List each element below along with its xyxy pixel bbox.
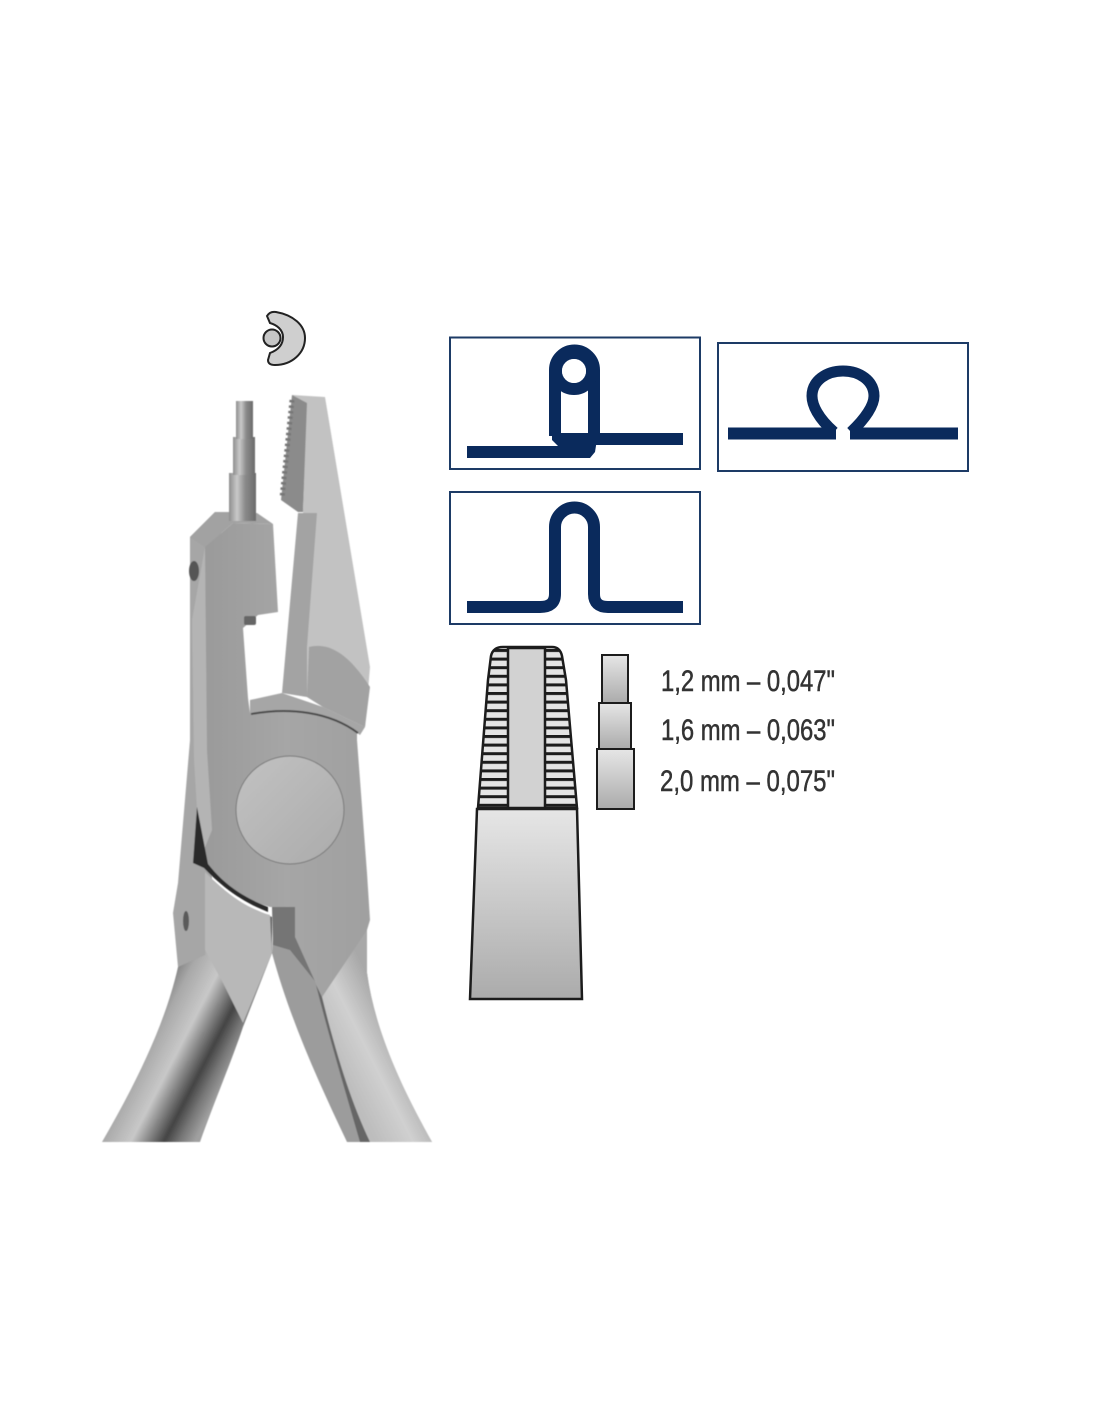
left handle [102,887,272,1142]
jaw inner facet [282,513,317,697]
outer left plate [173,512,235,967]
pliers [102,395,432,1142]
round section [264,330,280,346]
pivot notch [272,907,318,985]
size labels [660,665,835,798]
crescent [267,312,305,365]
lower side screw [183,911,189,931]
step 1.6 mm [599,703,631,749]
right handle [272,907,432,1142]
jaw serrated side [281,395,308,512]
right jaw [250,395,370,735]
beak step small [236,401,253,439]
jaw teeth [282,400,292,498]
right handle highlight [322,930,432,1142]
beak step medium [233,437,255,475]
shelf line [251,711,358,733]
jaw shelf [250,693,365,735]
omega wire [728,428,958,440]
pivot disc [236,756,344,864]
step 2.0 mm [597,749,634,809]
crescent cross-section icon [264,312,305,365]
serrated tip [478,647,577,808]
label 1.2 mm: 1,2 mm – 0,047" [661,665,835,698]
step 1.2 mm [602,655,628,703]
jaw rounded shadow [307,646,370,727]
panel frame [718,343,968,471]
eye [556,353,592,389]
lower wire [467,446,590,458]
panel frame [450,492,700,624]
beak step large [229,473,256,521]
lower beak [470,809,582,999]
panel: loop with eye [450,338,700,469]
label 2.0 mm: 2,0 mm – 0,075" [660,765,835,798]
right handle inner channel [316,985,370,1142]
loop wire [467,508,683,607]
stepped beak diagram [597,655,634,809]
panel: omega loop [718,343,968,471]
panel: vertical loop [450,492,700,624]
loop base [552,433,598,458]
panel frame [450,338,700,469]
label 1.6 mm: 1,6 mm – 0,063" [661,714,835,747]
loop body [555,350,594,440]
round stepped beak [229,401,256,521]
jaw outer face [292,395,370,727]
left jaw block [203,523,370,997]
upper wire [590,433,683,445]
omega curve [812,371,874,432]
side screw [189,561,199,581]
left handle block [205,872,272,1023]
left jaw highlight band [192,547,212,860]
small pin [244,616,256,625]
pivot groove [193,807,268,912]
jaw top facet [190,512,273,547]
flat beak diagram [470,647,582,999]
centre strip [508,648,545,808]
eye centre [562,359,586,383]
